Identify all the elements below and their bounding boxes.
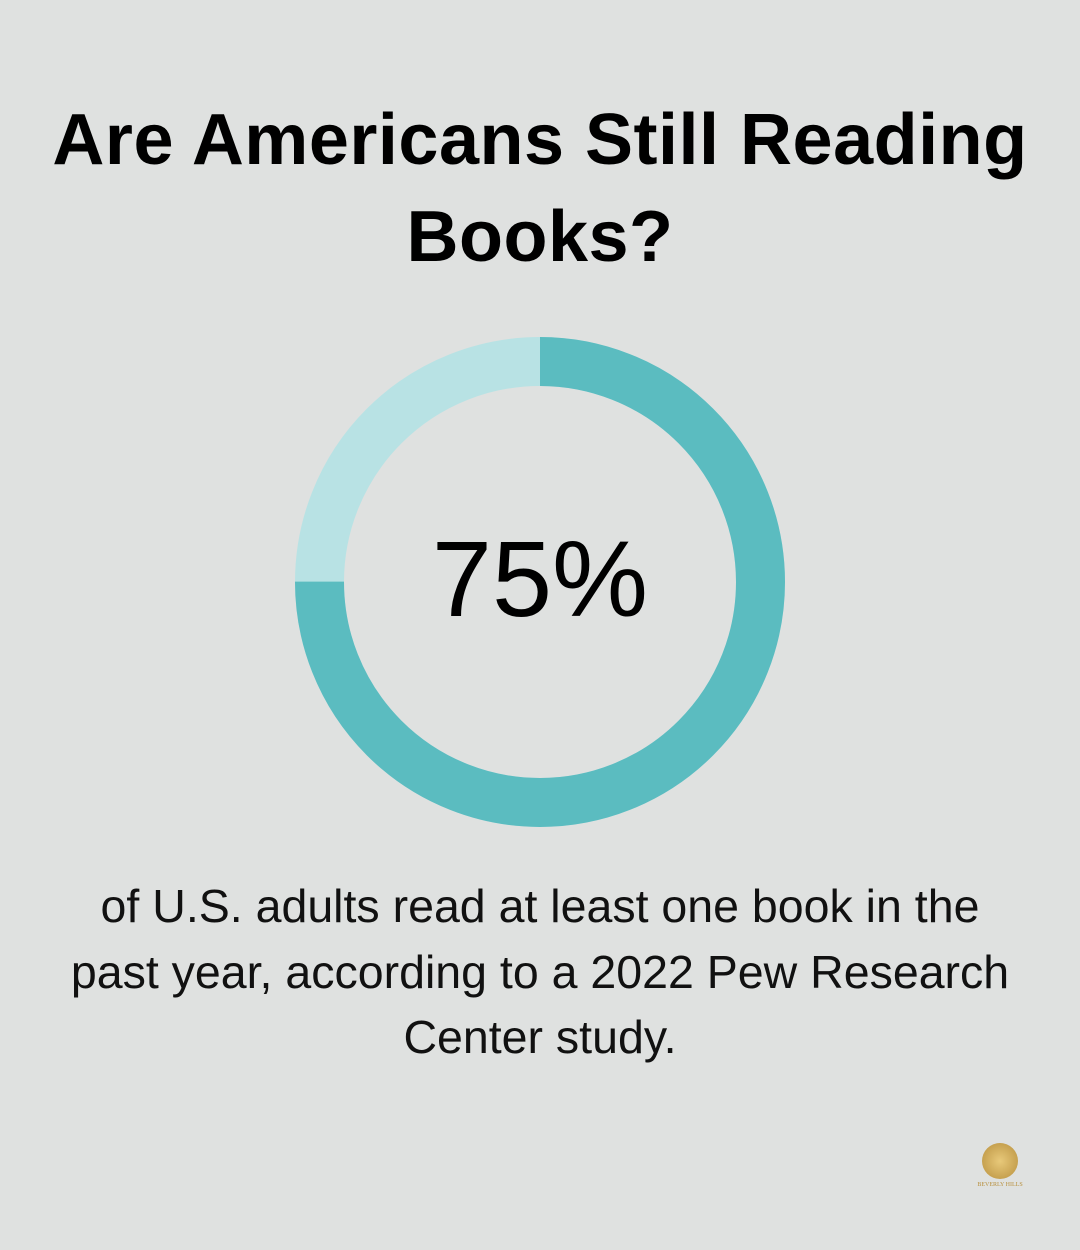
logo [977,1143,1023,1188]
title: Books? [406,197,674,277]
description text [71,880,1009,1063]
title: Are Americans Still Reading [52,100,1028,180]
stat value: 75% [432,518,648,639]
logo: BEVERLY HILLS [977,1182,1023,1188]
description text: past year, according to a 2022 Pew Research [71,946,1009,998]
title [52,100,1028,277]
description text: of U.S. adults read at least one book in the [101,880,979,932]
description text: Center study. [403,1011,677,1063]
